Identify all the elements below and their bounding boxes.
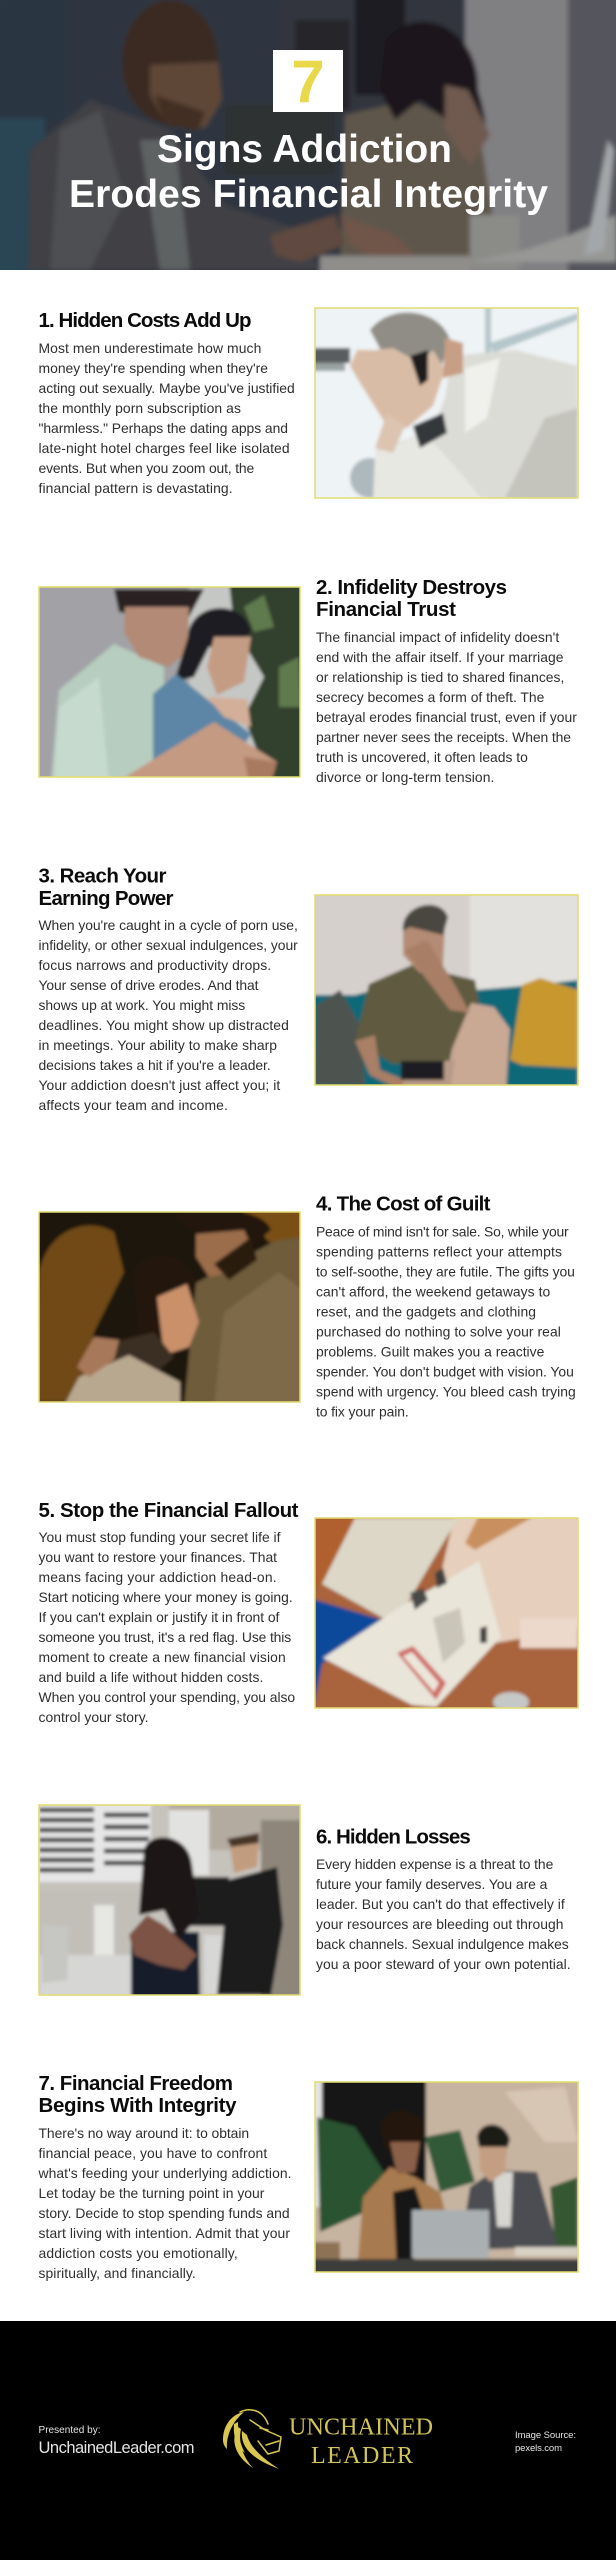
body text 2	[316, 629, 577, 785]
section 2: infidelity	[34, 576, 577, 785]
body text 2: truth is uncovered, it often leads to	[316, 749, 528, 765]
section 4: cost of guilt	[34, 1192, 576, 1420]
heading 6: 6. Hidden Losses	[316, 1826, 471, 1848]
number badge: 7	[291, 48, 325, 115]
footer band	[0, 2321, 616, 2560]
body text 2: secrecy becomes a form of theft. The	[316, 689, 545, 705]
body text 6: you a poor steward of your own potential.	[316, 1956, 571, 1972]
heading 5: 5. Stop the Financial Fallout	[38, 1499, 299, 1522]
body text 5	[38, 1529, 295, 1725]
heading 7: 7. Financial Freedom	[38, 2072, 233, 2095]
heading 3: Earning Power	[38, 887, 174, 910]
body text 6: future your family deserves. You are a	[316, 1876, 548, 1892]
number badge	[273, 48, 343, 115]
icon: gold lion head	[223, 2410, 281, 2469]
body text 5: moment to create a new financial vision	[38, 1649, 286, 1665]
photo: past due bill	[310, 1513, 585, 1713]
body text 4: problems. Guilt makes you a reactive	[316, 1344, 545, 1360]
body text 4: reset, and the gadgets and clothing	[316, 1304, 536, 1320]
body text 3: Your addiction doesn't just affect you; it	[38, 1077, 280, 1093]
body text 1: events. But when you zoom out, the	[38, 460, 254, 476]
photo: couple at laptop	[310, 2077, 585, 2277]
body text 5: Start noticing where your money is going.	[38, 1589, 293, 1605]
presented by credit: UnchainedLeader.com	[38, 2439, 194, 2457]
body text 6: Every hidden expense is a threat to the	[316, 1856, 554, 1872]
body text 5: You must stop funding your secret life if	[38, 1529, 281, 1545]
body text 3: deadlines. You might show up distracted	[38, 1017, 289, 1033]
body text 7: There's no way around it: to obtain	[38, 2125, 249, 2141]
body text 7: Let today be the turning point in your	[38, 2185, 265, 2201]
body text 7: financial peace, you have to confront	[38, 2145, 267, 2161]
body text 2: The financial impact of infidelity doesn't	[316, 629, 559, 645]
body text 2: or relationship is tied to shared finances,	[316, 669, 564, 685]
image source credit: Image Source:	[515, 2430, 576, 2441]
body text 5: and build a life without hidden costs.	[38, 1669, 263, 1685]
body text 1	[38, 340, 295, 496]
image source credit: pexels.com	[515, 2443, 562, 2454]
body text 7: start living with intention. Admit that your	[38, 2225, 290, 2241]
title: Signs Addiction	[157, 128, 452, 171]
header banner	[0, 0, 616, 280]
heading 7	[38, 2072, 237, 2117]
body text 3: When you're caught in a cycle of porn use,	[38, 917, 298, 933]
body text 3: shows up at work. You might miss	[38, 997, 245, 1013]
photo: couple resting	[34, 1207, 309, 1407]
body text 5: If you can't explain or justify it in front of	[38, 1609, 280, 1625]
body text 7: story. Decide to stop spending funds and	[38, 2205, 290, 2221]
body text 4: to fix your pain.	[316, 1404, 409, 1420]
body text 4: spending patterns reflect your attempts	[316, 1244, 562, 1260]
body text 3: in meetings. Your ability to make sharp	[38, 1037, 277, 1053]
body text 4: Peace of mind isn't for sale. So, while your	[316, 1224, 569, 1240]
heading 7: Begins With Integrity	[38, 2094, 237, 2117]
wordmark: LEADER	[311, 2443, 413, 2469]
body text 3: infidelity, or other sexual indulgences, your	[38, 937, 298, 953]
body text 4	[316, 1224, 576, 1420]
body text 2: partner never sees the receipts. When the	[316, 729, 571, 745]
image source credit	[515, 2430, 576, 2454]
body text 6: leader. But you can't do that effectively if	[316, 1896, 565, 1912]
section 1: hidden costs	[38, 303, 585, 503]
body text 5: When you control your spending, you also	[38, 1689, 295, 1705]
section 5: financial fallout	[38, 1499, 585, 1725]
body text 3: focus narrows and productivity drops.	[38, 957, 271, 973]
heading 4: 4. The Cost of Guilt	[316, 1192, 491, 1216]
body text 1: the monthly porn subscription as	[38, 400, 241, 416]
wordmark	[289, 2414, 433, 2469]
body text 1: "harmless." Perhaps the dating apps and	[38, 420, 288, 436]
body text 4: can't afford, the weekend getaways to	[316, 1284, 550, 1300]
body text 4: spend with urgency. You bleed cash trying	[316, 1384, 576, 1400]
photo: embracing couple	[34, 582, 309, 782]
heading 3	[38, 864, 174, 910]
logo: Unchained Leader	[223, 2410, 433, 2469]
section 3: earning power	[38, 864, 585, 1113]
body text 3: decisions takes a hit if you're a leader.	[38, 1057, 271, 1073]
body text 5: you want to restore your finances. That	[38, 1549, 277, 1565]
photo: couple in kitchen	[34, 1800, 309, 2000]
body text 7: addiction costs you emotionally,	[38, 2245, 238, 2261]
photo: man on sofa	[310, 890, 585, 1090]
body text 5: means facing your addiction head-on.	[38, 1569, 277, 1585]
body text 6	[316, 1856, 571, 1972]
presented by credit	[38, 2425, 194, 2457]
body text 5: someone you trust, it's a red flag. Use this	[38, 1629, 291, 1645]
body text 6: your resources are bleeding out through	[316, 1916, 564, 1932]
body text 1: financial pattern is devastating.	[38, 480, 233, 496]
body text 1: acting out sexually. Maybe you've justified	[38, 380, 295, 396]
body text 2: betrayal erodes financial trust, even if your	[316, 709, 577, 725]
body text 7: what's feeding your underlying addiction.	[38, 2165, 292, 2181]
body text 4: spender. You don't budget with vision. You	[316, 1364, 574, 1380]
presented by credit: Presented by:	[38, 2425, 100, 2436]
body text 2: divorce or long-term tension.	[316, 769, 494, 785]
body text 2: end with the affair itself. If your marriage	[316, 649, 564, 665]
wordmark: UNCHAINED	[289, 2414, 433, 2440]
title: Erodes Financial Integrity	[69, 173, 548, 216]
title	[69, 128, 548, 216]
body text 4: to self-soothe, they are futile. The gifts you	[316, 1264, 575, 1280]
heading 2: Financial Trust	[316, 598, 456, 621]
body text 3: affects your team and income.	[38, 1097, 228, 1113]
body text 3	[38, 917, 298, 1113]
heading 2	[316, 576, 507, 621]
header photo: couple at table	[0, 0, 616, 280]
body text 1: late-night hotel charges feel like isolated	[38, 440, 290, 456]
body text 4: purchased do nothing to solve your real	[316, 1324, 561, 1340]
body text 6: back channels. Sexual indulgence makes	[316, 1936, 569, 1952]
body text 3: Your sense of drive erodes. And that	[38, 977, 259, 993]
section 6: hidden losses	[34, 1800, 571, 2000]
heading 1: 1. Hidden Costs Add Up	[38, 309, 252, 332]
body text 1: money they're spending when they're	[38, 360, 268, 376]
section 7: financial freedom	[38, 2072, 585, 2281]
body text 7: spiritually, and financially.	[38, 2265, 196, 2281]
body text 1: Most men underestimate how much	[38, 340, 261, 356]
photo: man holding head	[310, 303, 585, 503]
body text 5: control your story.	[38, 1709, 148, 1725]
heading 3: 3. Reach Your	[38, 864, 167, 888]
body text 7	[38, 2125, 292, 2281]
heading 2: 2. Infidelity Destroys	[316, 576, 507, 599]
